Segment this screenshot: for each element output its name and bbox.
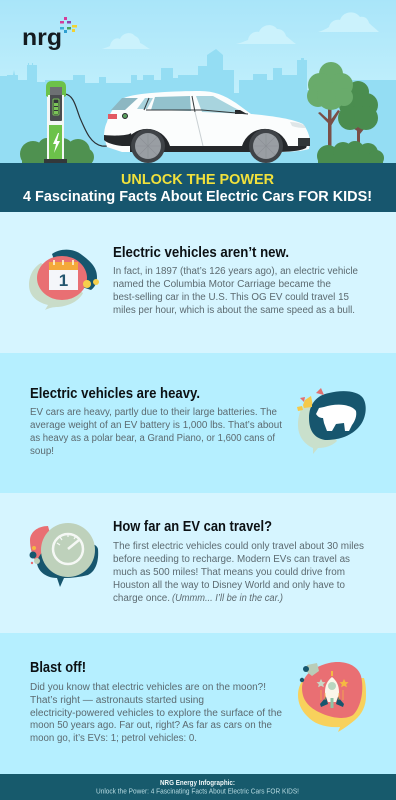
clouds — [102, 12, 379, 49]
body text: (Ummm... I’ll be in the car.) — [172, 593, 283, 604]
body text: before needing to recharge. Modern EVs can travel as — [113, 554, 350, 565]
heading: Blast off! — [30, 659, 86, 676]
panel: electric vehicles are heavy — [0, 353, 396, 493]
body text: best-selling car in the U.S. This OG EV could travel 15 — [113, 292, 349, 303]
footer subtitle: Unlock the Power: 4 Fascinating Facts About Electric Cars FOR KIDS! — [96, 788, 299, 796]
charging cable — [65, 94, 125, 146]
title banner — [0, 163, 396, 212]
body text: Houston all the way to Disney World and only have to — [113, 580, 345, 591]
footer — [0, 774, 396, 800]
trees — [307, 62, 378, 151]
body text: That’s right — astronauts started using — [30, 695, 204, 706]
body text — [113, 266, 358, 316]
body text: much as 500 miles! That means you could drive from — [113, 567, 345, 578]
heading: How far an EV can travel? — [113, 518, 272, 535]
body text — [30, 682, 282, 744]
title line 1: UNLOCK THE POWER — [121, 172, 275, 188]
icon: speedometer — [30, 523, 98, 587]
bush right — [317, 141, 384, 167]
body text: electricity-powered vehicles to explore the surface of the — [30, 708, 282, 719]
heading: Electric vehicles aren’t new. — [113, 244, 289, 261]
body text: Did you know that electric vehicles are on the moon?! — [30, 682, 266, 693]
panel: how far an EV can travel — [0, 493, 396, 633]
icon: calendar — [29, 250, 99, 310]
bush left — [20, 138, 94, 167]
panel: electric vehicles aren't new — [0, 212, 396, 353]
body text: average weight of an EV battery is 1,000 lbs. That’s about — [30, 420, 282, 431]
hero illustration: sky, city, charger and car — [0, 0, 396, 167]
body text: moon go, it’s EVs: 1; petrol vehicles: 0. — [30, 733, 197, 744]
body text: miles per hour, which is about the same speed as a bull. — [113, 305, 355, 316]
body text: EV cars are heavy, partly due to their large batteries. The — [30, 407, 277, 418]
charger station — [44, 81, 67, 163]
body text: In fact, in 1897 (that’s 126 years ago), an electric vehicle — [113, 266, 358, 277]
title line 2: 4 Fascinating Facts About Electric Cars FOR KIDS! — [23, 189, 372, 205]
car — [104, 91, 310, 163]
body text: The first electric vehicles could only travel about 30 miles — [113, 541, 364, 552]
logo: nrg — [22, 17, 77, 50]
body text — [30, 407, 282, 457]
body text: named the Columbia Motor Carriage became the — [113, 279, 331, 290]
logo mark — [60, 17, 77, 33]
body text — [113, 541, 364, 604]
panel: blast off — [0, 633, 396, 774]
body text: moon 50 years ago. Far out, right? As far as cars on the — [30, 720, 272, 731]
heading: Electric vehicles are heavy. — [30, 385, 200, 402]
body text: charge once. — [113, 593, 170, 604]
icon: calendar: 1 — [59, 271, 68, 290]
body text: as heavy as a polar bear, a Grand Piano, or 1,600 cans of — [30, 433, 275, 444]
icon: polar bear — [297, 388, 366, 454]
footer title: NRG Energy Infographic: — [160, 780, 235, 787]
logo: nrg: nrg — [22, 24, 62, 50]
city skyline — [0, 49, 396, 164]
body text: soup! — [30, 446, 54, 457]
icon: rocket — [298, 662, 366, 732]
